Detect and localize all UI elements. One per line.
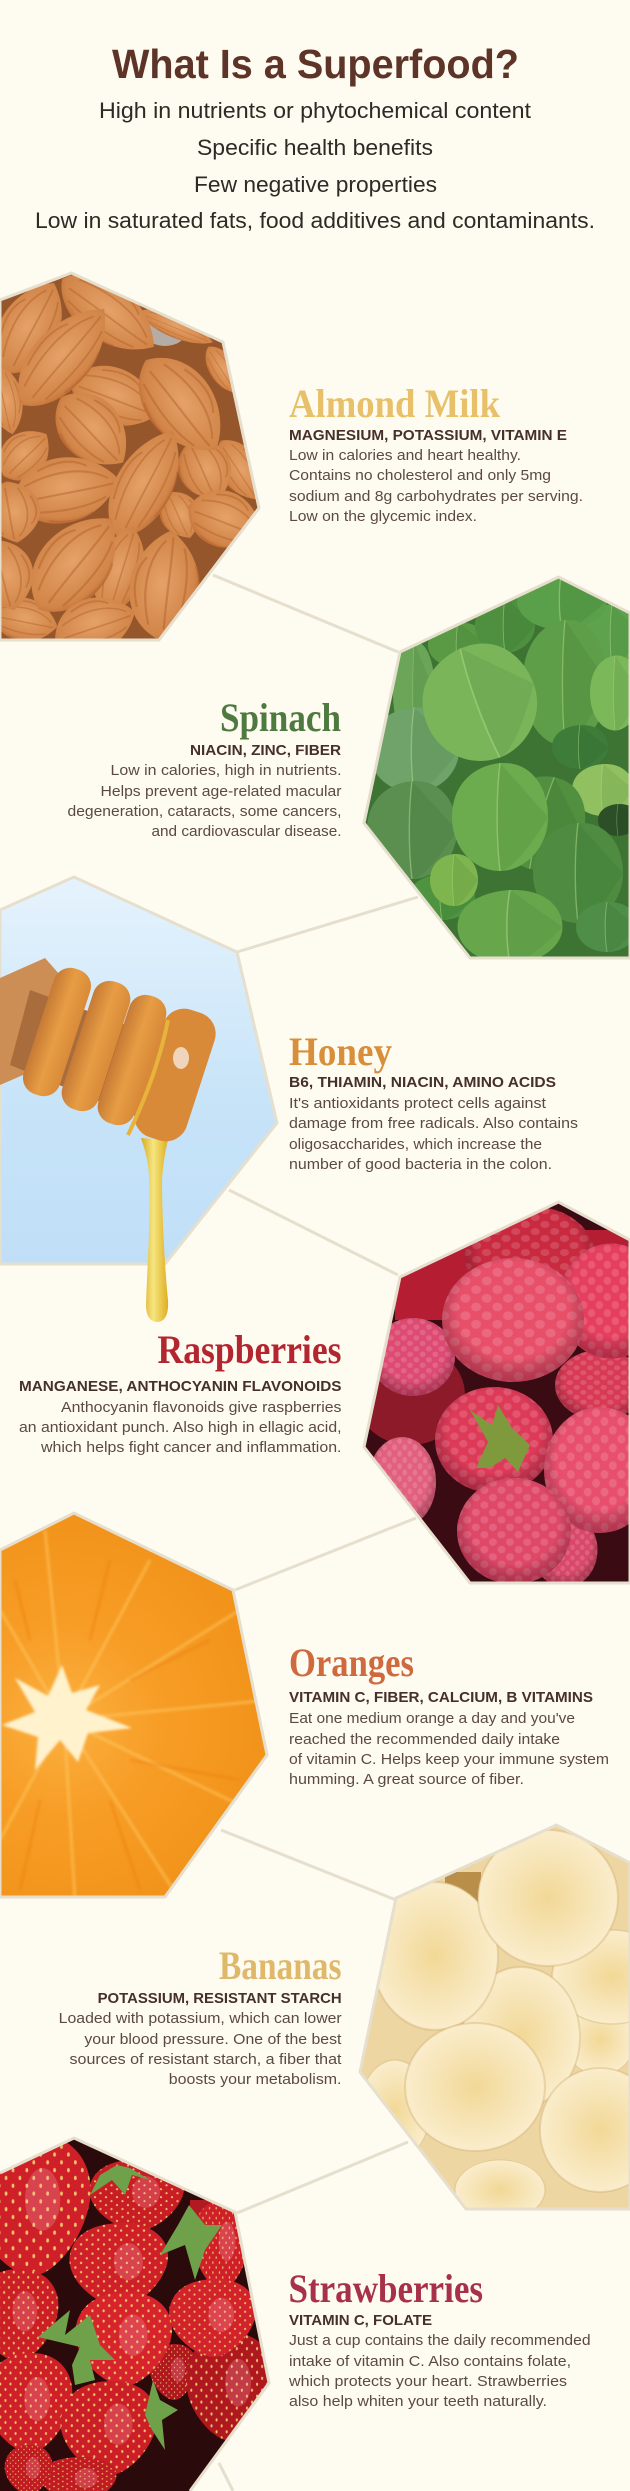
nutrients: POTASSIUM, RESISTANT STARCH: [98, 1990, 342, 2007]
body text: an antioxidant punch. Also high in ellagic acid,: [19, 1419, 342, 1436]
heading: almond milk: Almond Milk: [289, 381, 501, 426]
panel: spinach: [68, 570, 630, 964]
body text: degeneration, cataracts, some cancers,: [68, 803, 342, 820]
body text: number of good bacteria in the colon.: [289, 1156, 552, 1173]
body text: oligosaccharides, which increase the: [289, 1136, 542, 1153]
body text: also help whiten your teeth naturally.: [289, 2393, 547, 2410]
body text: It's antioxidants protect cells against: [289, 1095, 547, 1112]
body text: sodium and 8g carbohydrates per serving.: [289, 488, 583, 505]
honey dipper handle and discs: [0, 958, 221, 1147]
panel: almond milk: [0, 255, 583, 662]
heading: raspberries: Raspberries: [158, 1327, 342, 1372]
nutrients: MAGNESIUM, POTASSIUM, VITAMIN E: [289, 427, 567, 444]
body text: [288, 2332, 591, 2410]
nutrients: MANGANESE, ANTHOCYANIN FLAVONOIDS: [19, 1378, 342, 1395]
body text: Low on the glycemic index.: [289, 508, 477, 525]
photo: almonds: [0, 272, 260, 642]
body text: and cardiovascular disease.: [152, 823, 342, 840]
body text: which helps fight cancer and inflammation.: [40, 1439, 342, 1456]
honey drip: [141, 1138, 168, 1322]
body text: which protects your heart. Strawberries: [288, 2373, 567, 2390]
photo: raspberries: [355, 1200, 630, 1588]
body text: Low in calories and heart healthy.: [289, 447, 521, 464]
body text: intake of vitamin C. Also contains folate,: [289, 2353, 571, 2370]
nutrients: B6, THIAMIN, NIACIN, AMINO ACIDS: [289, 1074, 556, 1091]
panel: raspberries: [19, 1200, 630, 1588]
nutrients: VITAMIN C, FOLATE: [289, 2312, 432, 2329]
body text: Loaded with potassium, which can lower: [59, 2010, 342, 2027]
body text: [289, 447, 583, 525]
body text: reached the recommended daily intake: [289, 1731, 560, 1748]
body text: humming. A great source of fiber.: [289, 1771, 524, 1788]
body text: Just a cup contains the daily recommended: [289, 2332, 591, 2349]
nutrients: VITAMIN C, FIBER, CALCIUM, B VITAMINS: [289, 1689, 593, 1706]
panel: bananas: [59, 1825, 630, 2220]
body text: [19, 1399, 342, 1456]
panel: honey: [0, 875, 578, 1322]
connector lines: [213, 575, 418, 2491]
body text: [68, 762, 342, 840]
body text: your blood pressure. One of the best: [84, 2031, 342, 2048]
panel: strawberries: [0, 2134, 591, 2491]
panel: oranges: [0, 1510, 609, 1900]
heading: honey: Honey: [289, 1029, 392, 1074]
photo: spinach: [360, 570, 630, 964]
photo: banana slices: [355, 1825, 630, 2220]
nutrients: NIACIN, ZINC, FIBER: [190, 742, 341, 759]
body text: damage from free radicals. Also contains: [289, 1115, 578, 1132]
body text: Eat one medium orange a day and you've: [289, 1710, 575, 1727]
intro list: [35, 98, 595, 233]
photo: orange slice: [0, 1510, 270, 1900]
heading: bananas: Bananas: [219, 1943, 342, 1988]
photo: honey dipper: [0, 875, 280, 1322]
heading: spinach: Spinach: [220, 695, 341, 740]
intro list: High in nutrients or phytochemical content: [99, 98, 531, 123]
body text: Contains no cholesterol and only 5mg: [289, 467, 551, 484]
body text: of vitamin C. Helps keep your immune system: [289, 1751, 609, 1768]
body text: boosts your metabolism.: [169, 2071, 342, 2088]
body text: [289, 1095, 578, 1173]
body text: Anthocyanin flavonoids give raspberries: [61, 1399, 342, 1416]
body text: Helps prevent age-related macular: [100, 783, 342, 800]
heading: oranges: Oranges: [289, 1640, 414, 1685]
title: What Is a Superfood?: [112, 41, 519, 87]
body text: sources of resistant starch, a fiber that: [70, 2051, 342, 2068]
body text: [59, 2010, 342, 2088]
body text: [289, 1710, 609, 1788]
photo: strawberries: [0, 2134, 273, 2491]
intro list: Specific health benefits: [197, 135, 433, 160]
intro list: Few negative properties: [194, 172, 437, 197]
intro list: Low in saturated fats, food additives and contaminants.: [35, 208, 595, 233]
heading: strawberries: Strawberries: [288, 2266, 483, 2311]
body text: Low in calories, high in nutrients.: [110, 762, 342, 779]
